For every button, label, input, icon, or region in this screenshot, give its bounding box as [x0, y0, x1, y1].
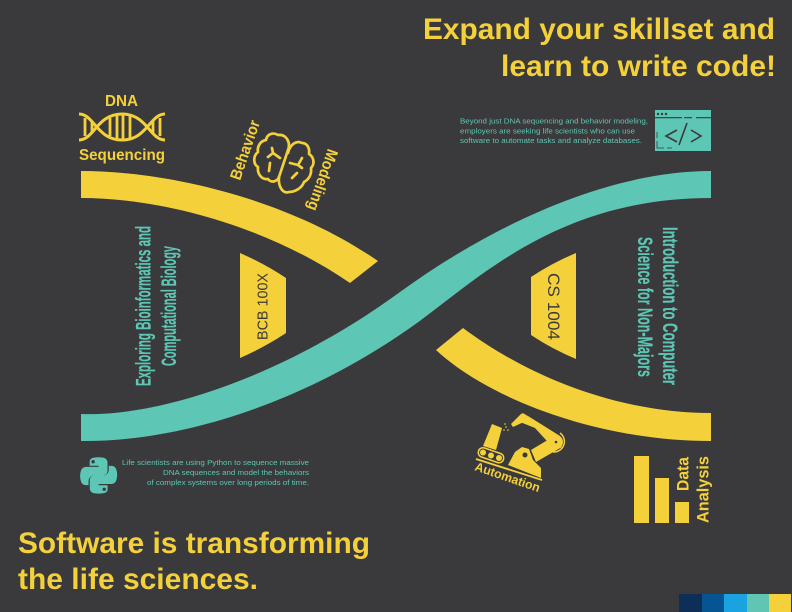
chart icon: data analysis bars: Data	[674, 457, 692, 491]
icon: DNA sequencing	[79, 93, 165, 164]
course name: intro to computer science	[633, 227, 681, 385]
title: software is transforming	[18, 527, 370, 596]
text: employers paragraph: employers are seeking life scientists who can use	[460, 126, 635, 136]
title: expand your skillset	[423, 13, 776, 83]
course tag: BCB 100X	[240, 253, 286, 358]
icon: brain with behavior modeling: Modeling	[303, 147, 340, 213]
text: python paragraph: of complex systems over long periods of time.	[147, 478, 309, 487]
course name: bioinformatics: Computational Biology	[158, 246, 181, 366]
course tag: BCB 100X: BCB 100X	[254, 273, 272, 340]
text: python paragraph: Life scientists are using Python to sequence massive	[122, 458, 309, 467]
chart icon: data analysis bars	[634, 456, 712, 523]
icon: python logo	[80, 457, 117, 494]
colour swatch strip	[679, 594, 791, 612]
text: employers paragraph: Beyond just DNA sequencing and behavior modeling,	[460, 116, 648, 126]
course tag: CS 1004	[531, 253, 576, 359]
icon: robot arm automation	[473, 413, 564, 495]
text: python paragraph: DNA sequences and model the behaviors	[163, 468, 309, 477]
course name: intro to computer science: Introduction to Computer	[658, 227, 681, 385]
text: employers paragraph	[460, 116, 648, 145]
title: expand your skillset: Expand your skillset and	[423, 13, 775, 46]
icon: DNA sequencing: Sequencing	[79, 147, 165, 164]
icon: robot arm automation: Automation	[473, 460, 542, 495]
title: software is transforming: the life sciences.	[18, 563, 258, 596]
course name: bioinformatics: Exploring Bioinformatics and	[132, 226, 156, 386]
course name: intro to computer science: Science for Non-Majors	[633, 237, 656, 377]
course tag: CS 1004: CS 1004	[544, 273, 563, 340]
title: software is transforming: Software is transforming	[18, 527, 370, 560]
course name: bioinformatics	[132, 226, 181, 386]
icon: brain with behavior modeling	[228, 118, 340, 213]
icon: DNA sequencing: DNA	[105, 93, 138, 110]
ribbon: yellow upper left	[81, 171, 378, 283]
chart icon: data analysis bars: Analysis	[694, 456, 712, 523]
ribbon: teal crossing	[81, 171, 711, 441]
ribbon: yellow lower right	[436, 328, 711, 441]
text: employers paragraph: software to automate tasks and analyze databases.	[460, 136, 642, 145]
icon: code window	[655, 110, 711, 151]
title: expand your skillset: learn to write code!	[501, 50, 776, 83]
icon: brain with behavior modeling: Behavior	[228, 118, 264, 182]
text: python paragraph	[122, 458, 309, 487]
